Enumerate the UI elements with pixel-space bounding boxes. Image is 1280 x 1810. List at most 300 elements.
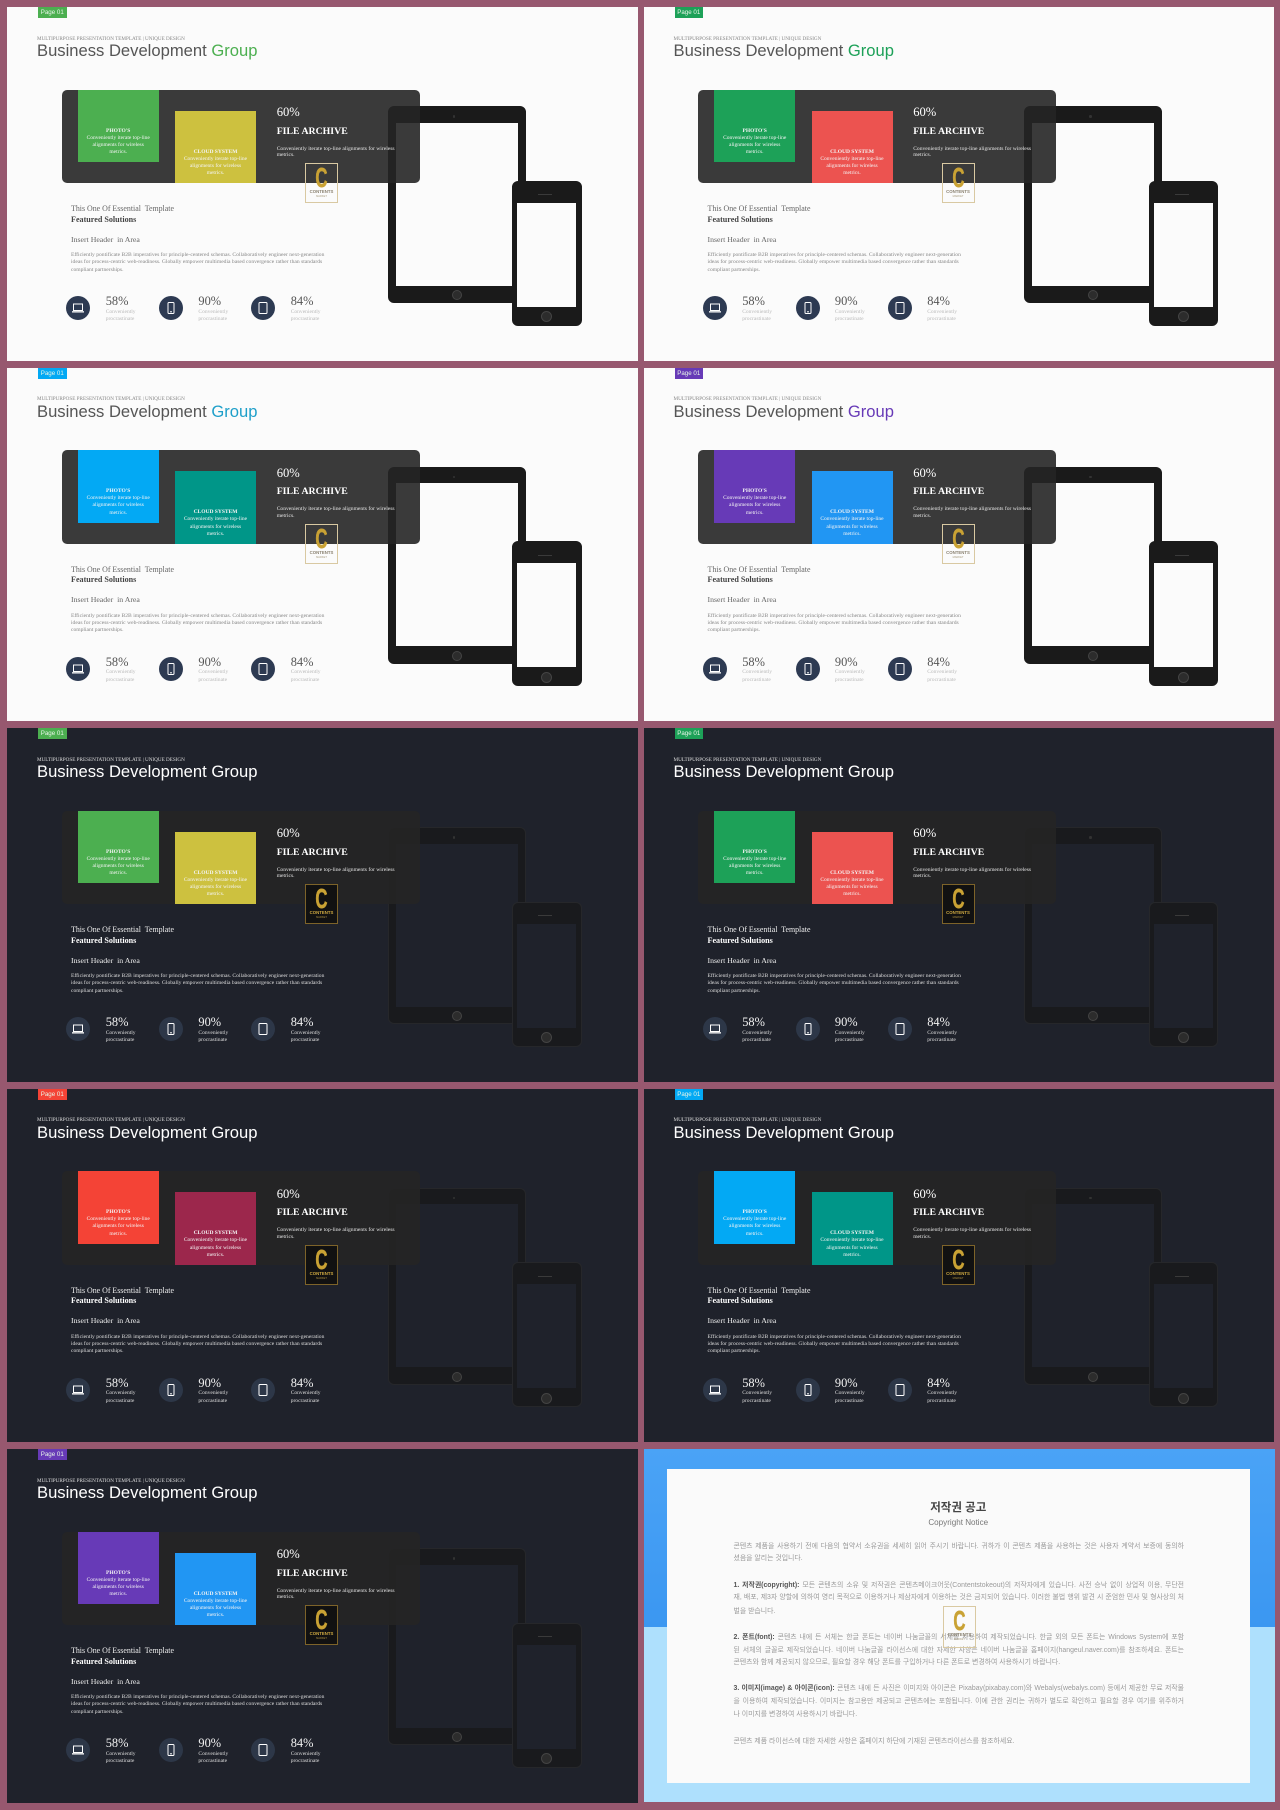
- stat: phone 90%: 90%: [198, 294, 221, 308]
- stat: phone 90%: 90%: [835, 294, 858, 308]
- card: cloud system: [812, 111, 892, 183]
- card: photos: Conveniently iterate top-line: [723, 135, 786, 141]
- page tab: [674, 728, 703, 739]
- text block: Efficiently pontificate B2B imperatives for principle-centered schemas. Collaboratively engineer next-generation: [708, 252, 961, 258]
- stat: tablet 84%: Conveniently: [927, 669, 957, 675]
- file archive text: [913, 466, 1031, 519]
- text block: ideas for process-centric web-readiness. Globally empower multimedia based convergence rather than standards: [708, 259, 959, 265]
- card: cloud system: alignments for wireless: [190, 524, 241, 530]
- stat: phone 90%: [796, 655, 865, 683]
- tablet mockup: [1024, 466, 1162, 664]
- subtitle: MULTIPURPOSE PRESENTATION TEMPLATE | UNIQUE DESIGN: [37, 1478, 185, 1484]
- logo badge: CONTENTS: [310, 910, 333, 915]
- stat: tablet 84%: Conveniently: [927, 1030, 957, 1036]
- stat: tablet 84%: [251, 294, 321, 322]
- stat: laptop 58%: procrastinate: [106, 316, 134, 322]
- stat: laptop 58%: procrastinate: [106, 677, 134, 683]
- stat: tablet 84%: 84%: [291, 1015, 313, 1029]
- stat: tablet 84%: procrastinate: [927, 1398, 956, 1404]
- dark banner: [62, 450, 420, 544]
- page tab: [674, 368, 703, 378]
- stat: phone 90%: procrastinate: [198, 316, 227, 322]
- card: photos: Conveniently iterate top-line: [87, 495, 150, 501]
- card: photos: metrics.: [109, 1591, 127, 1597]
- text block: Insert Header in Area: [71, 956, 140, 964]
- card: photos: Conveniently iterate top-line: [723, 495, 786, 501]
- stat: tablet 84%: 84%: [291, 1376, 313, 1390]
- text block: ideas for process-centric web-readiness. Globally empower multimedia based convergence rather than standards: [71, 1701, 322, 1707]
- card: cloud system: Conveniently iterate top-line: [820, 516, 884, 522]
- card: photos: metrics.: [746, 149, 763, 155]
- phone mockup: [1148, 1262, 1218, 1407]
- clause 2 line 3: 콘텐츠와 함께 제공되지 않으므로, 필요할 경우 해당 폰트를 구입하거나 다른 폰트로 변경하여 사용하시기 바랍니다.: [734, 1659, 1060, 1666]
- text block: [71, 565, 324, 633]
- stat: tablet 84%: procrastinate: [291, 1037, 319, 1043]
- stat: tablet 84%: 84%: [927, 1015, 950, 1029]
- file archive text: metrics.: [913, 873, 931, 879]
- stat: phone 90%: Conveniently: [198, 1030, 228, 1036]
- card: cloud system: alignments for wireless: [826, 524, 878, 530]
- card: cloud system: [175, 1192, 256, 1265]
- stat: tablet 84%: procrastinate: [927, 316, 956, 322]
- stat: phone 90%: [159, 1015, 228, 1043]
- tablet mockup: [388, 466, 526, 664]
- panel: dark slide sky blue: [644, 1088, 1274, 1442]
- card: photos: Conveniently iterate top-line: [87, 135, 150, 141]
- phone mockup: [512, 541, 582, 686]
- stat: laptop 58%: [703, 1015, 772, 1043]
- stat: laptop 58%: 58%: [106, 1736, 128, 1750]
- card: photos: Conveniently iterate top-line: [87, 856, 150, 862]
- card: photos: [78, 450, 159, 522]
- card: photos: Conveniently iterate top-line: [723, 1216, 786, 1222]
- text block: [708, 1286, 970, 1358]
- stat: phone 90%: 90%: [198, 1376, 221, 1390]
- logo badge: CONTENTS: [946, 910, 970, 915]
- title: Business Development Group: [674, 1123, 894, 1142]
- card: cloud system: CLOUD SYSTEM: [194, 149, 237, 155]
- logo badge: [943, 1606, 976, 1648]
- card: photos: PHOTO'S: [106, 1570, 130, 1576]
- text block: Efficiently pontificate B2B imperatives for principle-centered schemas. Collaboratively engineer next-generation: [71, 252, 324, 258]
- stat: laptop 58%: procrastinate: [106, 1758, 134, 1764]
- stat: laptop 58%: [703, 655, 772, 683]
- file archive text: FILE ARCHIVE: [913, 1207, 984, 1218]
- text block: [708, 204, 961, 273]
- file archive text: FILE ARCHIVE: [277, 1207, 348, 1218]
- text block: Efficiently pontificate B2B imperatives for principle-centered schemas. Collaboratively engineer next-generation: [71, 1694, 324, 1700]
- text block: This One Of Essential Template: [71, 204, 174, 213]
- stat: laptop 58%: Conveniently: [742, 1390, 772, 1396]
- text block: compliant partnerships.: [71, 988, 124, 994]
- text block: ideas for process-centric web-readiness. Globally empower multimedia based convergence rather than standards: [71, 620, 322, 626]
- dark banner: [698, 450, 1056, 544]
- dark banner: [62, 90, 420, 183]
- text block: [71, 925, 324, 994]
- stat: laptop 58%: 58%: [742, 1376, 765, 1390]
- page tab: [38, 368, 66, 378]
- text block: Insert Header in Area: [708, 234, 776, 244]
- text block: compliant partnerships.: [71, 627, 124, 633]
- title: Business Development Group: [674, 762, 894, 781]
- notice card: [666, 1469, 1250, 1783]
- stat: phone 90%: [796, 294, 865, 322]
- logo badge: CONTENTS: [310, 1631, 333, 1636]
- stat: tablet 84%: procrastinate: [291, 1398, 319, 1404]
- stat: laptop 58%: Conveniently: [106, 669, 136, 675]
- stat: laptop 58%: Conveniently: [742, 309, 772, 315]
- file archive text: metrics.: [913, 513, 931, 519]
- card: cloud system: [812, 1192, 892, 1265]
- card: photos: PHOTO'S: [106, 488, 130, 494]
- page tab: [674, 1088, 703, 1100]
- logo badge: CONTENTS: [948, 1632, 971, 1637]
- stat: laptop 58%: [66, 1015, 136, 1043]
- stat: tablet 84%: Conveniently: [291, 1030, 321, 1036]
- stat: tablet 84%: [251, 1738, 331, 1768]
- page tab: [38, 728, 66, 739]
- stat: tablet 84%: procrastinate: [927, 1037, 956, 1043]
- stat: tablet 84%: Conveniently: [927, 309, 957, 315]
- clause 3 line 2: 을 이용하여 제작되었습니다. 이미지는 참고용만 제공되고 콘텐츠에는 포함됩니다. 이에 관한 권리는 귀하가 별도로 확인하고 필요할 경우 여기를 위주하거: [734, 1698, 1184, 1705]
- stat: phone 90%: Conveniently: [835, 669, 865, 675]
- text block: Featured Solutions: [708, 1296, 773, 1305]
- logo badge: MARKET: [954, 1638, 965, 1641]
- stat: phone 90%: procrastinate: [198, 1037, 227, 1043]
- text block: This One Of Essential Template: [708, 1286, 810, 1295]
- card: cloud system: alignments for wireless: [190, 163, 241, 169]
- page tab: Page 01: [41, 730, 64, 737]
- card: photos: [78, 1171, 159, 1244]
- card: photos: alignments for wireless: [729, 863, 780, 869]
- file archive text: 60%: [913, 1186, 936, 1200]
- tablet mockup: [1024, 827, 1162, 1024]
- text block: Featured Solutions: [71, 936, 136, 944]
- dark banner: [698, 1171, 1056, 1264]
- card: cloud system: Conveniently iterate top-line: [184, 516, 247, 522]
- stat: laptop 58%: 58%: [742, 1015, 765, 1029]
- stat: phone 90%: Conveniently: [198, 1751, 228, 1757]
- subtitle: MULTIPURPOSE PRESENTATION TEMPLATE | UNIQUE DESIGN: [37, 1117, 185, 1123]
- text block: compliant partnerships.: [708, 627, 760, 633]
- card: photos: alignments for wireless: [93, 1584, 144, 1590]
- stat: laptop 58%: 58%: [106, 1376, 128, 1390]
- card: photos: [78, 1532, 159, 1604]
- card: cloud system: CLOUD SYSTEM: [194, 509, 237, 515]
- page tab: Page 01: [677, 1090, 700, 1098]
- text block: compliant partnerships.: [708, 267, 760, 273]
- text block: Featured Solutions: [71, 214, 136, 224]
- page tab: [38, 1449, 66, 1460]
- file archive text: metrics.: [913, 1234, 931, 1240]
- logo badge: MARKET: [316, 916, 327, 919]
- text block: ideas for process-centric web-readiness. Globally empower multimedia based convergence rather than standards: [708, 1341, 959, 1347]
- file archive text: metrics.: [277, 513, 295, 519]
- tablet mockup: [388, 827, 526, 1024]
- stat: tablet 84%: [251, 1015, 321, 1043]
- intro line 2: 셨음을 알리는 것입니다.: [734, 1555, 803, 1562]
- file archive text: [913, 1186, 1031, 1240]
- text block: Insert Header in Area: [708, 595, 776, 604]
- file archive text: Conveniently iterate top-line alignments for wireless: [277, 1588, 395, 1594]
- text block: [708, 925, 961, 994]
- stat: tablet 84%: 84%: [927, 1376, 950, 1390]
- stat: tablet 84%: 84%: [927, 655, 950, 669]
- stat: laptop 58%: Conveniently: [742, 1030, 772, 1036]
- text block: compliant partnerships.: [71, 267, 124, 273]
- file archive text: Conveniently iterate top-line alignments for wireless: [913, 1227, 1031, 1233]
- stat: laptop 58%: 58%: [742, 655, 765, 669]
- stat: phone 90%: procrastinate: [198, 1758, 227, 1764]
- card: photos: [714, 90, 795, 162]
- stat: phone 90%: 90%: [835, 655, 858, 669]
- dark banner: [62, 1532, 420, 1625]
- file archive text: metrics.: [277, 1234, 295, 1240]
- card: photos: metrics.: [746, 870, 763, 876]
- card: photos: alignments for wireless: [729, 1223, 780, 1229]
- text block: This One Of Essential Template: [71, 1646, 174, 1655]
- stat: tablet 84%: 84%: [927, 294, 950, 308]
- text block: This One Of Essential Template: [71, 1286, 174, 1295]
- stat: tablet 84%: Conveniently: [291, 1751, 321, 1757]
- file archive text: 60%: [913, 826, 936, 840]
- stat: phone 90%: procrastinate: [835, 316, 864, 322]
- file archive text: [276, 466, 395, 519]
- subtitle: MULTIPURPOSE PRESENTATION TEMPLATE | UNIQUE DESIGN: [674, 1117, 821, 1123]
- card: photos: [714, 810, 795, 883]
- text block: ideas for process-centric web-readiness. Globally empower multimedia based convergence rather than standards: [708, 620, 959, 626]
- page tab: Page 01: [41, 370, 64, 376]
- card: photos: PHOTO'S: [742, 128, 767, 134]
- card: cloud system: Conveniently iterate top-line: [184, 1237, 247, 1243]
- title: Business Development Group: [674, 41, 894, 60]
- stat: phone 90%: [796, 1378, 876, 1408]
- text block: Featured Solutions: [71, 1296, 136, 1305]
- clause 3 line 1: 3. 이미지(image) & 아이콘(icon): 콘텐츠 내에 든 사진은 이미지와 아이콘은 Pixabay(pixabay.com)와 Webalys(webalys.com) 등에서 제공한 무료 저작물: [734, 1685, 1184, 1692]
- stat: laptop 58%: Conveniently: [106, 1390, 136, 1396]
- text block: Featured Solutions: [708, 936, 773, 944]
- clause 1 line 1: 1. 저작권(copyright): 모든 콘텐츠의 소유 및 저작권은 콘텐츠메이크어웃(Contentstokeout)의 저작자에게 있습니다. 사전 승낙 없이 상업적 이용, 무단전: [734, 1582, 1184, 1589]
- stat: phone 90%: 90%: [198, 655, 221, 669]
- stat: tablet 84%: 84%: [291, 1736, 313, 1750]
- stat: laptop 58%: [66, 655, 136, 683]
- text block: Featured Solutions: [708, 214, 773, 224]
- stat: tablet 84%: 84%: [291, 294, 313, 308]
- text block: Featured Solutions: [708, 575, 773, 584]
- tablet mockup: [388, 106, 526, 303]
- card: photos: PHOTO'S: [106, 1209, 130, 1215]
- stat: tablet 84%: [251, 655, 321, 683]
- stat: tablet 84%: [251, 1376, 321, 1404]
- card: photos: PHOTO'S: [742, 848, 767, 854]
- stat: tablet 84%: Conveniently: [927, 1390, 957, 1396]
- stat: phone 90%: [159, 1376, 228, 1404]
- stat: tablet 84%: [888, 294, 957, 322]
- text block: Efficiently pontificate B2B imperatives for principle-centered schemas. Collaboratively engineer next-generation: [708, 1334, 961, 1340]
- stat: tablet 84%: 84%: [291, 655, 313, 669]
- card: photos: metrics.: [746, 510, 763, 516]
- card: cloud system: metrics.: [207, 891, 224, 897]
- file archive text: 60%: [913, 466, 936, 480]
- card: photos: metrics.: [109, 149, 127, 155]
- stat: laptop 58%: procrastinate: [106, 1037, 134, 1043]
- card: cloud system: alignments for wireless: [826, 884, 878, 890]
- panel: dark slide green: [7, 728, 638, 1082]
- file archive text: 60%: [277, 1186, 300, 1200]
- stat: phone 90%: 90%: [835, 1376, 858, 1390]
- logo badge: [942, 884, 974, 924]
- file archive text: 60%: [277, 105, 300, 119]
- clause 1 line 3: 벌을 받습니다.: [734, 1608, 775, 1615]
- stat: tablet 84%: procrastinate: [927, 677, 956, 683]
- text block: Efficiently pontificate B2B imperatives for principle-centered schemas. Collaboratively engineer next-generation: [71, 613, 324, 619]
- card: photos: alignments for wireless: [93, 142, 144, 148]
- file archive text: 60%: [277, 826, 300, 840]
- stat: laptop 58%: Conveniently: [106, 1030, 136, 1036]
- text block: ideas for process-centric web-readiness. Globally empower multimedia based convergence rather than standards: [71, 980, 322, 986]
- tablet mockup: [388, 1188, 526, 1384]
- file archive text: [277, 1546, 412, 1606]
- card: cloud system: Conveniently iterate top-line: [184, 156, 247, 162]
- clause 2 line 1: 2. 폰트(font): 콘텐츠 내에 든 서체는 한글 폰트는 네이버 나눔글꼴의 서체를 사용하여 제작되었습니다. 한글 외의 모든 폰트는 Windows System에 포함: [734, 1634, 1184, 1641]
- text block: Efficiently pontificate B2B imperatives for principle-centered schemas. Collaboratively engineer next-generation: [71, 1334, 324, 1340]
- card: cloud system: Conveniently iterate top-line: [184, 1598, 247, 1604]
- page tab: [38, 1088, 66, 1100]
- stat: phone 90%: [159, 655, 228, 683]
- stat: phone 90%: 90%: [198, 1015, 221, 1029]
- card: cloud system: metrics.: [843, 170, 861, 176]
- card: cloud system: alignments for wireless: [190, 1605, 241, 1611]
- panel: dark slide emerald: [644, 728, 1274, 1082]
- text block: This One Of Essential Template: [708, 565, 810, 574]
- text block: This One Of Essential Template: [71, 925, 174, 934]
- file archive text: metrics.: [277, 1594, 295, 1600]
- logo badge: MARKET: [316, 195, 327, 198]
- card: cloud system: CLOUD SYSTEM: [194, 1230, 237, 1236]
- panel: light slide purple: [644, 368, 1274, 721]
- file archive text: Conveniently iterate top-line alignments for wireless: [913, 146, 1031, 152]
- phone mockup: [1148, 181, 1218, 326]
- card: cloud system: CLOUD SYSTEM: [194, 1591, 237, 1597]
- stat: phone 90%: procrastinate: [198, 1398, 227, 1404]
- file archive text: Conveniently iterate top-line alignments for wireless: [277, 146, 395, 152]
- stat: laptop 58%: procrastinate: [742, 1037, 771, 1043]
- text block: compliant partnerships.: [71, 1348, 124, 1354]
- card: photos: alignments for wireless: [93, 502, 144, 508]
- text block: ideas for process-centric web-readiness. Globally empower multimedia based convergence rather than standards: [71, 259, 322, 265]
- card: photos: [78, 810, 159, 883]
- file archive text: 60%: [913, 105, 936, 119]
- file archive text: 60%: [277, 1547, 300, 1561]
- stat: phone 90%: procrastinate: [835, 1398, 864, 1404]
- stat: laptop 58%: Conveniently: [106, 309, 136, 315]
- title: Business Development Group: [37, 1123, 257, 1142]
- stat: tablet 84%: Conveniently: [291, 1390, 321, 1396]
- page tab: Page 01: [677, 9, 700, 16]
- phone mockup: [1148, 902, 1218, 1047]
- stat: phone 90%: Conveniently: [198, 1390, 228, 1396]
- stat: tablet 84%: Conveniently: [291, 309, 321, 315]
- card: cloud system: [175, 111, 256, 183]
- phone mockup: [512, 181, 582, 326]
- file archive text: FILE ARCHIVE: [913, 847, 984, 858]
- logo badge: MARKET: [953, 195, 963, 198]
- card: cloud system: [175, 471, 256, 544]
- logo badge: [942, 1245, 974, 1285]
- card: cloud system: metrics.: [207, 1612, 224, 1618]
- page tab: Page 01: [677, 370, 700, 376]
- card: cloud system: alignments for wireless: [826, 163, 878, 169]
- card: photos: [78, 90, 159, 162]
- stat: phone 90%: Conveniently: [835, 1030, 865, 1036]
- card: photos: metrics.: [109, 870, 127, 876]
- card: photos: metrics.: [109, 510, 127, 516]
- clause 2 line 2: 된 서체의 글꼴로 제작되었습니다. 네이버 나눔글꼴 라이선스에 대한 자세한 사항은 네이버 나눔글꼴 홈페이지(hangeul.naver.com)를 참조하세요. 폰트는: [734, 1647, 1184, 1654]
- text block: Featured Solutions: [71, 1656, 136, 1666]
- stat: tablet 84%: [888, 1378, 968, 1408]
- file archive text: [913, 105, 1031, 158]
- stat: laptop 58%: [703, 1378, 783, 1408]
- card: cloud system: Conveniently iterate top-line: [820, 156, 884, 162]
- file archive text: metrics.: [277, 873, 295, 879]
- dark banner: [698, 810, 1056, 904]
- stat: phone 90%: Conveniently: [835, 309, 865, 315]
- card: cloud system: alignments for wireless: [826, 1245, 878, 1251]
- clause 1 line 2: 재, 배포, 제3자 양할에 의하여 영리 목적으로 이용하거나 제삼자에게 이용하는 것은 금지되어 있습니다. 이러한 불법 행위 발견 시 준엄한 민사 및 형사상의 처: [734, 1594, 1184, 1601]
- dark banner: [62, 810, 420, 904]
- page tab: Page 01: [41, 1090, 64, 1098]
- text block: Featured Solutions: [71, 575, 136, 584]
- subtitle: MULTIPURPOSE PRESENTATION TEMPLATE | UNIQUE DESIGN: [37, 757, 185, 763]
- text block: Insert Header in Area: [71, 595, 140, 604]
- card: cloud system: CLOUD SYSTEM: [830, 509, 874, 515]
- file archive text: metrics.: [277, 152, 295, 158]
- stat: phone 90%: procrastinate: [835, 1037, 864, 1043]
- text block: This One Of Essential Template: [708, 925, 810, 934]
- text block: Insert Header in Area: [71, 1316, 140, 1325]
- logo badge: [305, 163, 338, 203]
- logo badge: MARKET: [316, 556, 327, 559]
- text block: [71, 1646, 333, 1718]
- text block: ideas for process-centric web-readiness. Globally empower multimedia based convergence rather than standards: [71, 1341, 322, 1347]
- page tab: Page 01: [41, 9, 64, 16]
- stat: phone 90%: [159, 294, 228, 322]
- stat: laptop 58%: [66, 294, 136, 322]
- logo badge: [305, 884, 338, 924]
- card: photos: alignments for wireless: [93, 1223, 144, 1229]
- stat: phone 90%: 90%: [198, 1736, 221, 1750]
- card: cloud system: metrics.: [843, 531, 861, 537]
- text block: [71, 1286, 324, 1354]
- file archive text: Conveniently iterate top-line alignments for wireless: [277, 1227, 395, 1233]
- file archive text: FILE ARCHIVE: [913, 126, 984, 137]
- card: photos: PHOTO'S: [742, 488, 767, 494]
- stat: laptop 58%: procrastinate: [742, 1398, 771, 1404]
- card: cloud system: Conveniently iterate top-line: [184, 877, 247, 883]
- logo badge: CONTENTS: [946, 1271, 970, 1276]
- card: cloud system: alignments for wireless: [190, 1245, 241, 1251]
- tablet mockup: [1024, 1188, 1162, 1384]
- subtitle: MULTIPURPOSE PRESENTATION TEMPLATE | UNIQUE DESIGN: [674, 396, 821, 402]
- tablet mockup: [388, 1548, 526, 1745]
- text block: Insert Header in Area: [708, 1316, 776, 1325]
- subtitle: MULTIPURPOSE PRESENTATION TEMPLATE | UNIQUE DESIGN: [37, 396, 185, 402]
- card: photos: alignments for wireless: [93, 863, 144, 869]
- page tab: Page 01: [677, 730, 700, 737]
- card: cloud system: [175, 832, 256, 904]
- stat: phone 90%: procrastinate: [835, 677, 864, 683]
- stat: tablet 84%: Conveniently: [291, 669, 321, 675]
